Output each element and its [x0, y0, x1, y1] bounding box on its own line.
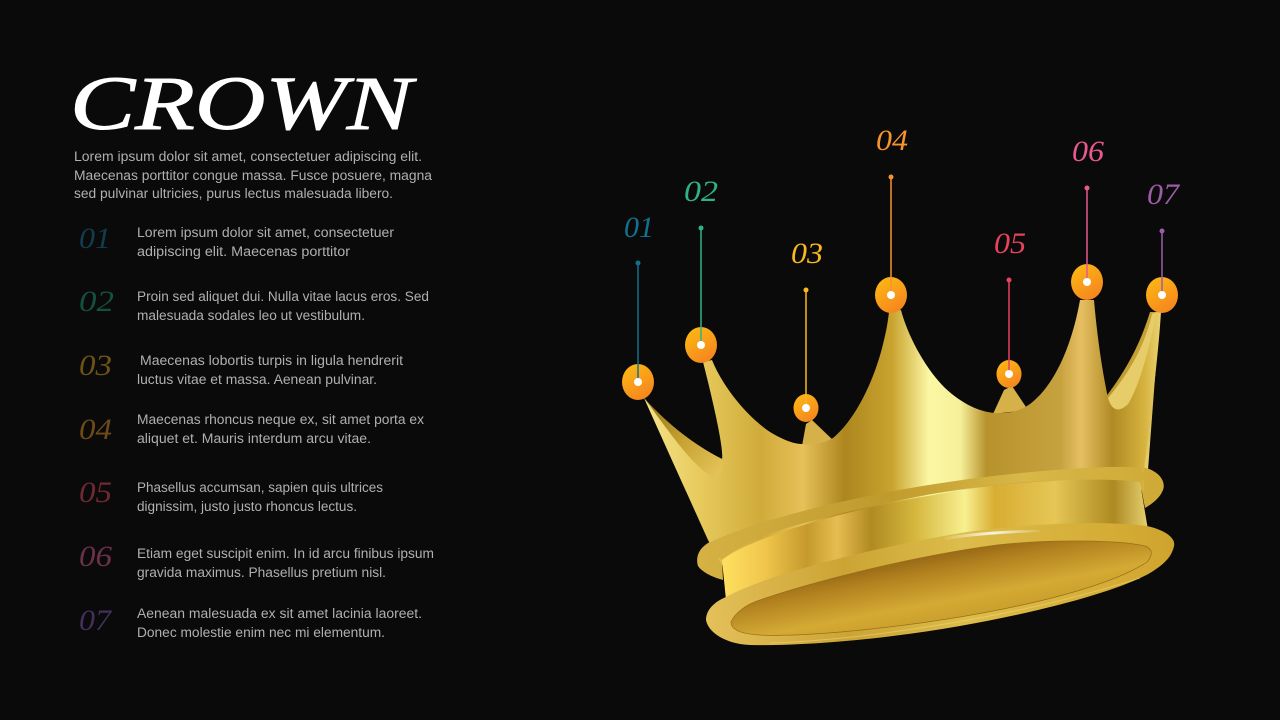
right spike inner fold — [1108, 312, 1157, 409]
list item 07 — [79, 604, 422, 640]
list item 07: Donec molestie enim nec mi elementum. — [137, 625, 385, 640]
list item 02 — [79, 285, 429, 323]
list item 01: Lorem ipsum dolor sit amet, consectetuer — [137, 225, 395, 240]
back right spike — [1105, 312, 1160, 470]
list item 03: luctus vitae et massa. Aenean pulvinar. — [137, 372, 377, 387]
list item 05 — [79, 476, 383, 514]
list item 01: 01 — [79, 222, 111, 255]
marker 05 — [994, 227, 1026, 388]
marker 02 — [684, 175, 718, 363]
middle band — [722, 480, 1148, 600]
marker 07: 07 — [1147, 178, 1181, 211]
back rim ring — [697, 467, 1164, 580]
list item 06 — [79, 540, 434, 580]
list item 05: dignissim, justo justo rhoncus lectus. — [137, 499, 357, 514]
crown body with spikes — [644, 300, 1161, 565]
marker 03 — [791, 237, 823, 422]
list item 02: malesuada sodales leo ut vestibulum. — [137, 308, 365, 323]
list item 06: Etiam eget suscipit enim. In id arcu finibus ipsum — [137, 546, 434, 561]
marker 02: 02 — [684, 175, 718, 208]
crown interior — [731, 541, 1151, 635]
list item 05: Phasellus accumsan, sapien quis ultrices — [137, 480, 383, 495]
list item 03 — [79, 349, 403, 387]
bottom lip — [706, 523, 1174, 645]
intro paragraph: sed pulvinar ultricies, purus lectus malesuada libero. — [74, 186, 393, 201]
title: CROWN — [70, 62, 418, 146]
list item 02: 02 — [79, 285, 114, 318]
intro paragraph — [74, 149, 433, 201]
list item 04 — [79, 412, 424, 446]
list item 07: 07 — [79, 604, 113, 637]
marker 03: 03 — [791, 237, 823, 270]
left spike inner fold — [644, 398, 723, 476]
list item 01: adipiscing elit. Maecenas porttitor — [137, 244, 351, 259]
list item 02: Proin sed aliquet dui. Nulla vitae lacus eros. Sed — [137, 289, 429, 304]
list item 06: gravida maximus. Phasellus pretium nisl. — [137, 565, 386, 580]
crown illustration — [644, 300, 1174, 645]
list item 04: Maecenas rhoncus neque ex, sit amet porta ex — [137, 412, 424, 427]
list item 06: 06 — [79, 540, 112, 573]
small back spike 05 — [993, 386, 1028, 414]
list item 05: 05 — [79, 476, 112, 509]
marker 04: 04 — [876, 124, 908, 157]
lip highlight — [945, 530, 1040, 540]
list item 07: Aenean malesuada ex sit amet lacinia laoreet. — [137, 606, 422, 621]
marker 01: 01 — [624, 211, 654, 244]
marker 04 — [875, 124, 908, 313]
list item 04: 04 — [79, 413, 112, 446]
list item 01 — [79, 222, 395, 259]
marker 06 — [1071, 135, 1104, 300]
small back spike 03 — [802, 420, 835, 446]
list item 03: Maecenas lobortis turpis in ligula hendrerit — [140, 353, 403, 368]
intro paragraph: Maecenas porttitor congue massa. Fusce posuere, magna — [74, 168, 433, 183]
upper ring — [708, 467, 1146, 560]
marker 07 — [1146, 178, 1181, 313]
marker 05: 05 — [994, 227, 1026, 260]
list item 03: 03 — [79, 349, 112, 382]
lip lower edge highlight — [770, 578, 1140, 643]
list item 04: aliquet et. Mauris interdum arcu vitae. — [137, 431, 371, 446]
marker 06: 06 — [1072, 135, 1104, 168]
intro paragraph: Lorem ipsum dolor sit amet, consectetuer adipiscing elit. — [74, 149, 422, 164]
marker 01 — [622, 211, 654, 400]
